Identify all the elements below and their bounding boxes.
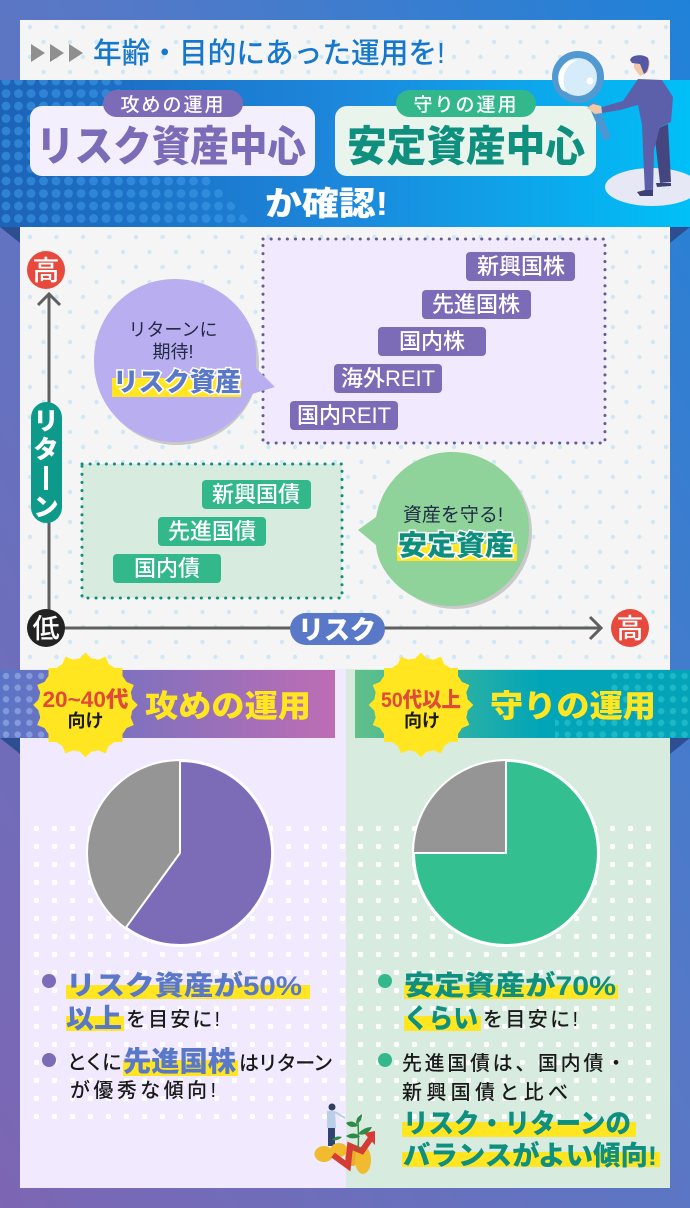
list: aggressive points: リスク資産が50% [66, 970, 302, 1001]
tag: domestic stocks: 国内株 [399, 329, 465, 354]
list: aggressive points: 先進国株 [123, 1046, 236, 1077]
illustration: coins, plant and person [314, 1104, 375, 1174]
tag: emerging stocks [466, 252, 575, 281]
ribbon: aggressive heading: 攻めの運用 [145, 689, 311, 724]
tag: domestic bonds [113, 554, 221, 583]
callout: risk assets [94, 279, 275, 445]
panel: conservative investing [346, 653, 690, 1188]
label: return axis: リ [33, 408, 59, 436]
list: aggressive points: 以上 [66, 1004, 122, 1034]
tag: emerging bonds [202, 480, 311, 509]
badge: ages 20 to 40 [33, 653, 138, 757]
label: high return: 高 [32, 256, 60, 286]
label: return axis [31, 402, 62, 523]
list: aggressive points [42, 970, 333, 1102]
badge: ages 50 and over: 向け [404, 711, 440, 731]
list: conservative points: くらい [404, 1004, 478, 1034]
callout: stable assets: 資産を守る! [403, 504, 503, 526]
tag: developed stocks: 先進国株 [432, 292, 520, 317]
list: conservative points: バランスがよい傾向! [403, 1140, 657, 1171]
illustration: person with magnifier [556, 54, 690, 206]
text: confirm: か確認! [265, 185, 388, 222]
list: conservative points: を目安に! [483, 1008, 578, 1031]
callout: risk assets: リスク資産 [113, 367, 241, 397]
tag: domestic stocks [378, 327, 486, 356]
card: risk assets: 攻めの運用 [120, 94, 226, 116]
card: risk assets: リスク資産中心 [36, 123, 306, 170]
badge: ages 50 and over [369, 653, 473, 757]
label: return axis: タ [33, 436, 59, 464]
list: conservative points: リスク・リターンの [403, 1109, 631, 1139]
icon: triple arrows [31, 44, 83, 62]
label: low: 低 [32, 614, 60, 644]
panel: stable assets list [82, 464, 342, 598]
tag: developed stocks [422, 290, 531, 319]
label: high return [27, 251, 65, 289]
label: return axis: ン [33, 494, 59, 522]
heading: top title: 年齢・目的にあった運用を! [93, 37, 445, 70]
card: stable assets [335, 90, 596, 176]
axes [38, 294, 601, 639]
list: aggressive points: が優秀な傾向! [70, 1079, 216, 1102]
tag: domestic REIT: 国内REIT [297, 403, 391, 428]
label: high risk [611, 609, 649, 647]
ribbon: conservative heading: 守りの運用 [490, 689, 656, 724]
tag: emerging stocks: 新興国株 [477, 254, 565, 279]
ribbon: aggressive heading [0, 670, 335, 754]
list: aggressive points: とくに [67, 1052, 122, 1074]
list: conservative points: 先進国債は、国内債・ [402, 1052, 626, 1075]
list: conservative points: 新興国債と比べ [402, 1081, 568, 1104]
list: aggressive points: はリターン [239, 1052, 333, 1075]
badge: ages 50 and over: 50代以上 [381, 689, 461, 712]
tag: developed bonds: 先進国債 [168, 519, 256, 544]
panel: aggressive investing [0, 653, 346, 1188]
banner: headline band [0, 80, 690, 243]
list: conservative points [378, 970, 660, 1171]
tag: overseas REIT: 海外REIT [341, 366, 435, 391]
tag: domestic bonds: 国内債 [134, 556, 200, 581]
badge: ages 20 to 40: 20~40代 [42, 687, 128, 712]
card: stable assets: 安定資産中心 [347, 123, 585, 170]
pie chart: 60 percent risk [86, 759, 274, 947]
panel: title strip [20, 20, 670, 80]
label: low [27, 609, 65, 647]
card: stable assets: 守りの運用 [413, 94, 519, 116]
callout: risk assets: 期待! [152, 342, 194, 362]
panel: risk assets list [263, 239, 605, 443]
callout: risk assets: リターンに [128, 320, 218, 340]
callout: stable assets [358, 452, 532, 609]
ribbon: conservative heading [355, 670, 690, 754]
tag: emerging bonds: 新興国債 [212, 482, 300, 507]
list: conservative points: 安定資産が70% [404, 970, 616, 1001]
badge: ages 20 to 40: 向け [68, 711, 104, 731]
callout: stable assets: 安定資産 [398, 530, 514, 561]
label: high risk: 高 [616, 614, 644, 644]
pie chart: 75 percent stable [412, 759, 600, 947]
panel: chart background [20, 227, 670, 669]
list: aggressive points: を目安に! [126, 1008, 220, 1031]
card: risk assets [30, 90, 315, 176]
label: risk axis: リスク [298, 615, 376, 645]
chart: risk return map [27, 239, 649, 647]
